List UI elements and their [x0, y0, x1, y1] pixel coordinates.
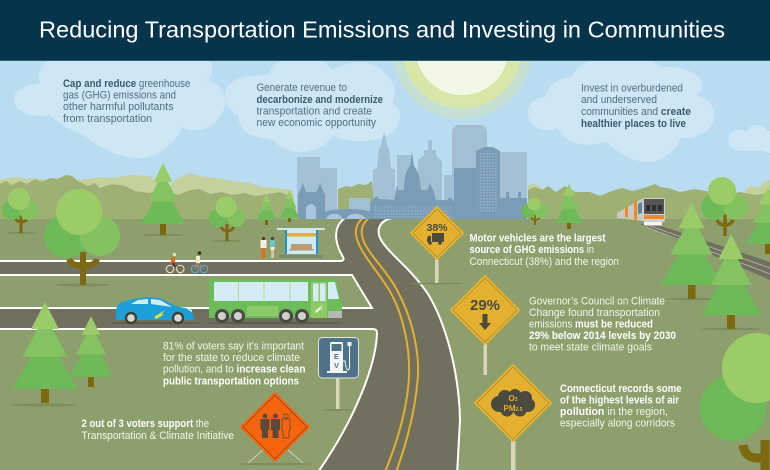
sun: [392, 0, 532, 119]
tree: round bottom right: [700, 333, 770, 470]
text: invest: [581, 82, 691, 130]
train: [617, 198, 665, 226]
cyclist 1: [166, 253, 184, 273]
sign: 29 percent arrow: 29%: [470, 297, 500, 314]
text: invest: Invest in overburdened: [581, 82, 683, 94]
sign: air pollution: O3: [508, 394, 518, 403]
text: generate revenue: [256, 82, 383, 129]
text: cap and reduce: gas (GHG) emissions and: [63, 90, 176, 102]
tree: pine 5: [660, 203, 722, 300]
yellow centre lines: [356, 219, 418, 470]
tree: pine 1: [141, 163, 185, 236]
electric bus: [207, 279, 343, 324]
sign: 38 percent truck: 38%: [426, 222, 448, 234]
text: governor's council: to meet state climate goals: [529, 342, 653, 354]
icon: truck: [427, 233, 444, 245]
text: 81 percent of voters: for the state to reduce climate: [163, 352, 300, 364]
text: air pollution: [560, 383, 682, 430]
text: cap and reduce: from transportation: [63, 113, 152, 125]
text: 2 out of 3 voters: [82, 418, 234, 442]
railway track: [640, 224, 770, 280]
text: motor vehicles: [470, 232, 619, 268]
text: 81 percent of voters: pollution, and to increase clean: [163, 364, 306, 376]
people at bus stop: [260, 237, 275, 258]
small cloud: [728, 125, 770, 153]
sign: air pollution: PM2.5: [504, 404, 523, 413]
sign: air pollution: [475, 365, 551, 470]
text: invest: and underserved: [581, 94, 657, 106]
text: generate revenue: transportation and create: [256, 106, 372, 118]
tree: small pine 3: [280, 190, 300, 222]
text: 2 out of 3 voters: 2 out of 3 voters support the: [82, 418, 209, 430]
tree: round 5: [701, 177, 748, 236]
text: 81 percent of voters: [163, 340, 306, 388]
text: motor vehicles: Motor vehicles are the largest: [470, 232, 606, 244]
tree: round large: [44, 189, 120, 286]
skyline: [297, 125, 527, 219]
icon: charger: V: [334, 361, 339, 370]
cloud: cap and reduce: [14, 60, 225, 158]
icon: pollution cloud: [491, 389, 535, 416]
text: governor's council: Governor’s Council on Climate: [529, 296, 665, 308]
text: invest: healthier places to live: [581, 118, 686, 130]
text: 81 percent of voters: 81% of voters say it’s important: [163, 340, 304, 352]
sign: EV charging: [318, 338, 358, 411]
title bar: [0, 0, 770, 61]
text: motor vehicles: Connecticut (38%) and the region: [470, 256, 619, 268]
bus shelter: [277, 228, 325, 258]
ground: [0, 219, 770, 470]
text: governor's council: 29% below 2014 levels by 2030: [529, 330, 676, 342]
text: air pollution: Connecticut records some: [560, 383, 682, 395]
cloud: generate revenue: [225, 60, 400, 152]
text: generate revenue: Generate revenue to: [256, 82, 347, 94]
tree: pine 9: [69, 316, 113, 387]
sign: 29 percent arrow: [451, 276, 519, 375]
cyclist 2: [191, 251, 208, 273]
tree: pine 4: [555, 184, 583, 229]
text: generate revenue: decarbonize and modernize: [256, 94, 383, 106]
text: invest: communities and create: [581, 106, 691, 118]
sky background: [0, 60, 770, 225]
text: 81 percent of voters: public transportation options: [163, 376, 299, 388]
text: governor's council: Change found transportation: [529, 307, 660, 319]
icon: people: [260, 414, 290, 438]
tree: small pine 2: [256, 194, 276, 225]
icon: charger: E: [334, 352, 339, 361]
text: air pollution: especially along corridors: [560, 418, 676, 430]
road: [0, 218, 460, 470]
tree: pine 6: [701, 234, 761, 330]
title: Reducing Transportation Emissions and Investing in Communities: [39, 16, 725, 42]
tree: round 3: [209, 196, 245, 242]
tree: pine 7: [746, 187, 770, 254]
sign: orange voters: [239, 393, 311, 465]
tree: pine 8: [12, 302, 78, 406]
text: governor's council: emissions must be reduced: [529, 318, 653, 330]
text: cap and reduce: [63, 78, 190, 125]
text: 2 out of 3 voters: Transportation & Climate Initiative: [82, 430, 234, 442]
text: cap and reduce: Cap and reduce greenhouse: [63, 78, 190, 90]
text: motor vehicles: source of GHG emissions in: [470, 244, 594, 256]
tree: round 1: [2, 188, 39, 234]
dark foreground buildings: [298, 147, 527, 219]
front hills: [0, 175, 770, 225]
cloud: invest: [528, 60, 714, 162]
electric car: [109, 297, 201, 324]
text: generate revenue: new economic opportunity: [256, 117, 377, 129]
text: air pollution: of the highest levels of air: [560, 394, 680, 406]
icon: down arrow: [479, 314, 491, 330]
back hills: [0, 173, 770, 225]
sign: 38 percent truck: [411, 207, 463, 284]
tree: round 4: [521, 198, 548, 225]
text: governor's council: [529, 296, 676, 354]
text: cap and reduce: other harmful pollutants: [63, 101, 174, 113]
icon: charger: [327, 342, 352, 373]
text: air pollution: pollution in the region,: [560, 406, 668, 418]
light background buildings: [297, 125, 527, 219]
arch openings: [306, 204, 316, 219]
